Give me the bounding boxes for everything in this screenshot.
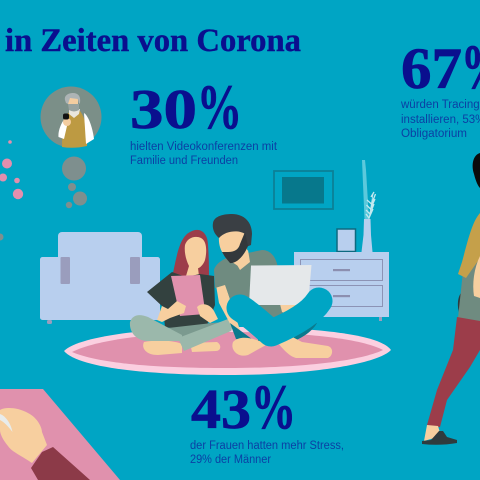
trouser leg back xyxy=(130,315,182,341)
vase with wheat xyxy=(362,160,376,252)
feet xyxy=(232,338,266,356)
title: in Zeiten von Corona xyxy=(5,23,301,59)
hair xyxy=(213,214,252,247)
statistic: 43%: % xyxy=(251,371,296,442)
icon: older man with phone in circle xyxy=(40,86,102,148)
shirt xyxy=(214,250,285,318)
mouse pad and hand xyxy=(0,389,120,480)
statistic: 30%: 30 xyxy=(130,79,197,141)
statistic: 43%: 43 xyxy=(191,379,251,441)
beard xyxy=(222,232,248,263)
woman sitting with tablet xyxy=(130,230,232,355)
bubbles: pink xyxy=(0,140,23,199)
feet xyxy=(143,341,220,355)
picture frame xyxy=(274,171,333,209)
hair xyxy=(172,230,209,282)
thought bubbles: grey xyxy=(0,156,87,240)
sofa xyxy=(40,232,160,324)
backpack xyxy=(458,292,462,319)
man sitting with laptop xyxy=(213,214,332,358)
laptop xyxy=(249,265,312,305)
trouser leg front xyxy=(178,319,232,351)
face xyxy=(185,237,206,276)
scarf xyxy=(458,213,480,278)
small photo frame xyxy=(337,229,356,252)
arm xyxy=(473,256,480,298)
panel: stress statistic xyxy=(190,371,344,466)
trousers xyxy=(427,317,480,427)
sleeve xyxy=(31,447,90,480)
hands under laptop xyxy=(280,304,296,313)
arms xyxy=(157,301,186,322)
text block: video calls: Familie und Freunden xyxy=(130,155,238,167)
face xyxy=(219,231,248,266)
shirt xyxy=(458,252,480,322)
statistic: 67%: 67 xyxy=(401,36,462,101)
text block: stress: 29% der Männer xyxy=(190,454,271,466)
dresser xyxy=(294,252,389,321)
hand xyxy=(0,408,47,463)
shirt xyxy=(147,272,215,329)
panel: video calls statistic xyxy=(130,71,278,167)
panel: tracing app statistic xyxy=(400,31,480,140)
neck xyxy=(233,250,250,270)
mouse xyxy=(0,414,12,432)
foot xyxy=(424,425,441,441)
text block: stress: der Frauen hatten mehr Stress, xyxy=(190,440,344,452)
legs crossed xyxy=(240,301,319,333)
rug xyxy=(64,327,391,375)
arm left xyxy=(216,284,240,333)
dark trousers xyxy=(230,318,317,346)
tablet xyxy=(171,275,206,316)
lap shadow xyxy=(168,322,225,338)
text block: tracing app: Obligatorium xyxy=(401,128,467,140)
sandal xyxy=(422,431,457,445)
text block: video calls: hielten Videokonferenzen mit xyxy=(130,141,278,153)
hair xyxy=(473,153,480,188)
statistic: 30%: % xyxy=(197,71,242,142)
walking woman xyxy=(422,153,480,445)
